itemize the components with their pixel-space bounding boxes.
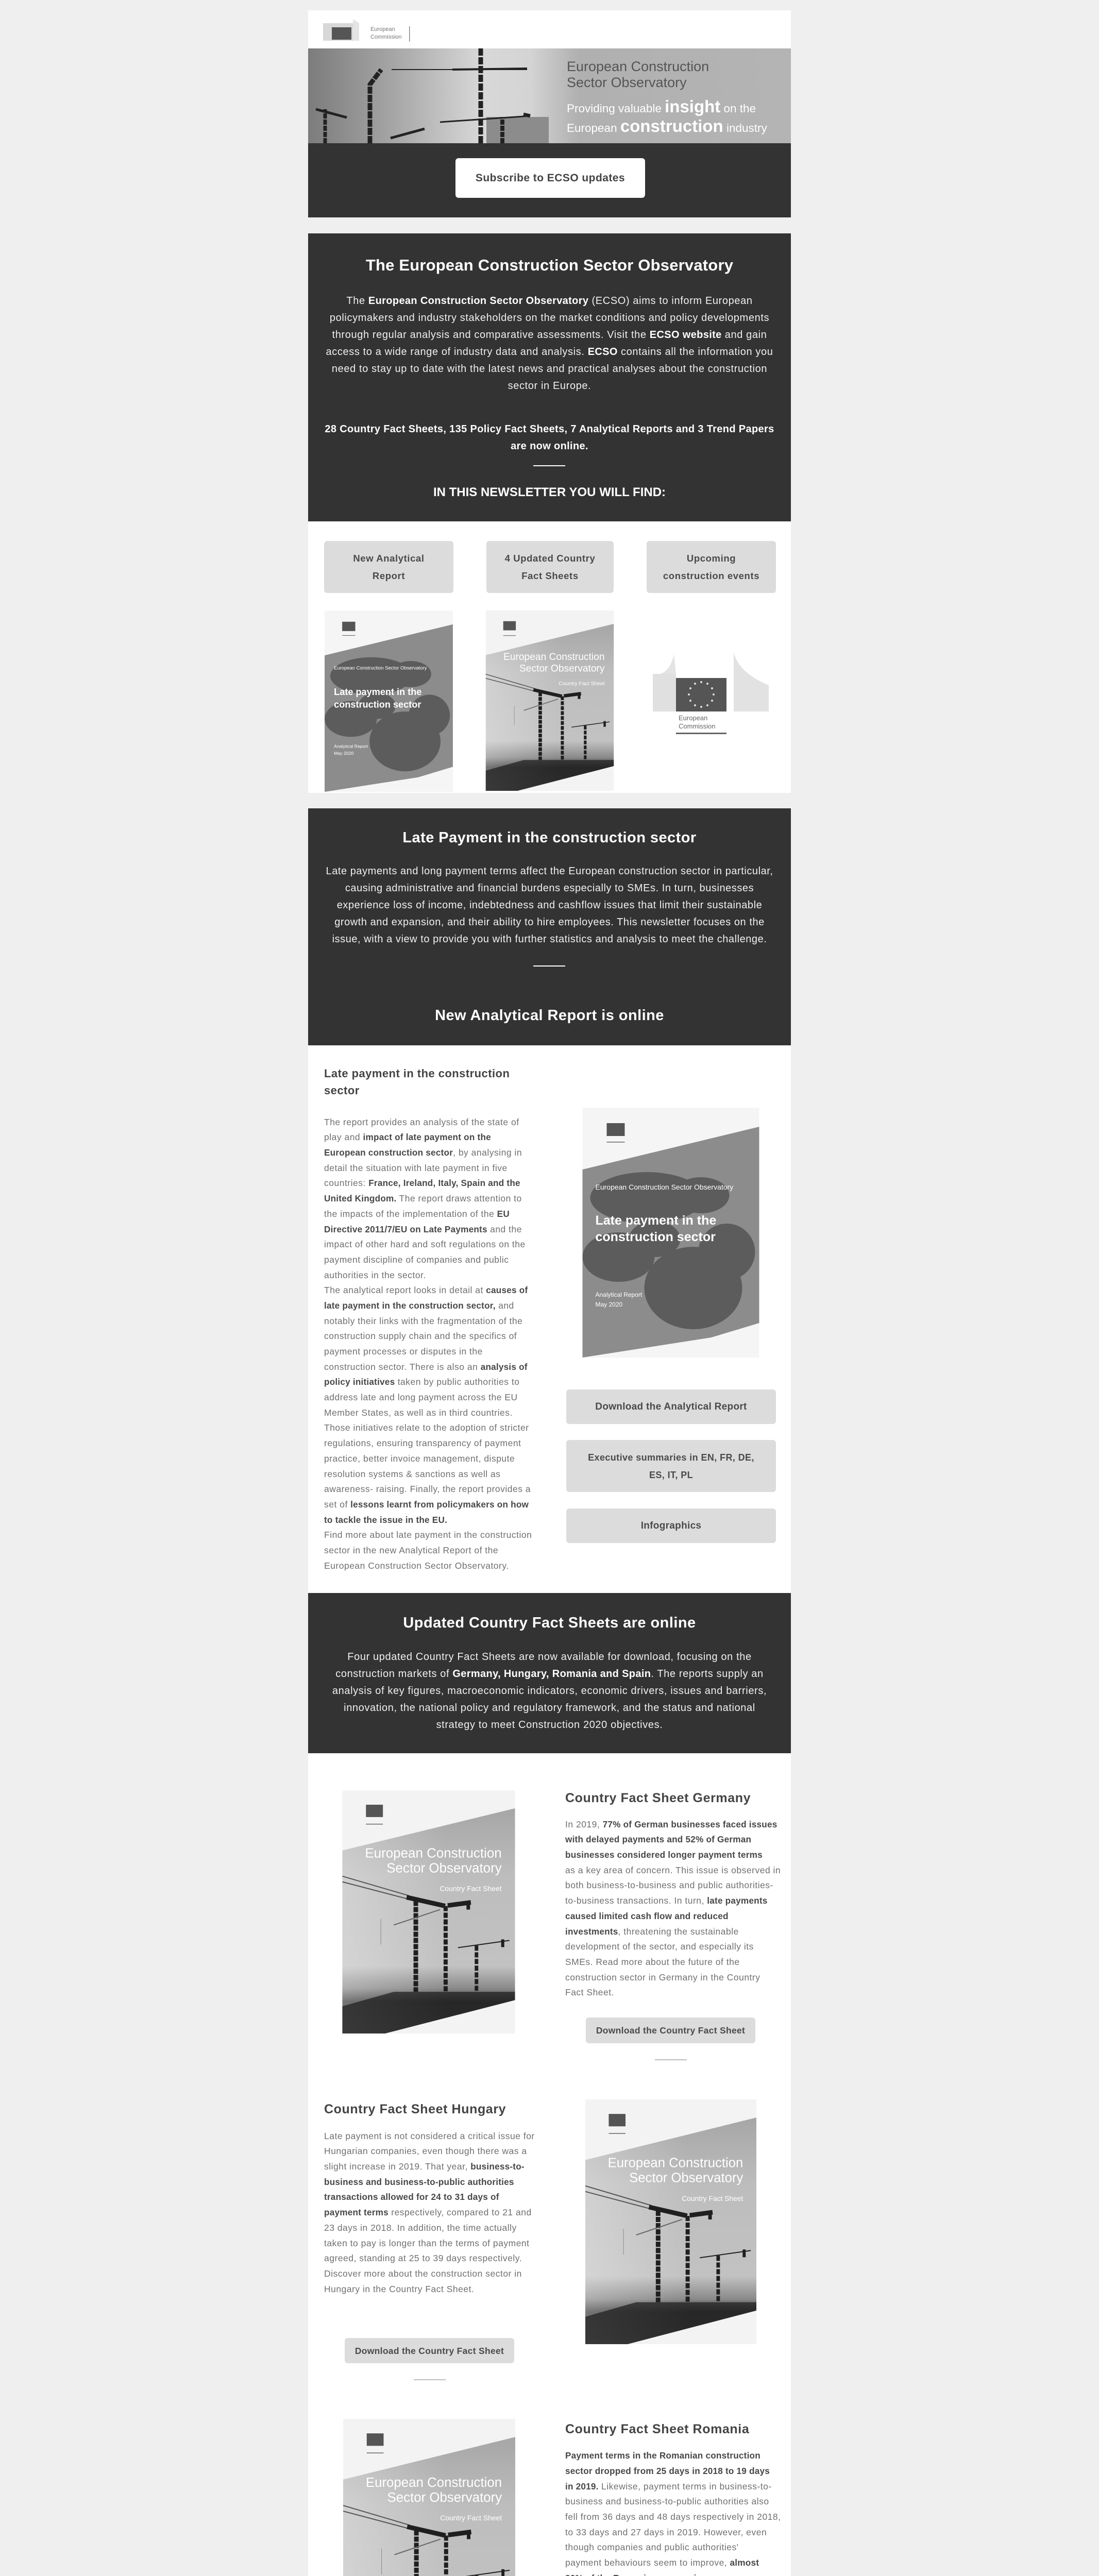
report text: resolution systems & sanctions as well as: [324, 1468, 500, 1479]
report text: The report provides an analysis of the state of: [324, 1117, 519, 1127]
text: Hungary: slight increase in 2019. That year, business-to-: [324, 2161, 525, 2172]
text: Romania: fell from 36 days and 48 days respectively in 2018,: [565, 2512, 781, 2522]
report title: sector: [324, 1084, 360, 1096]
late payment text: [326, 866, 773, 945]
button: new analytical report: [324, 541, 453, 593]
report text: Find more about late payment in the construction: [324, 1530, 532, 1540]
late payment text: growth and expansion, and their ability to hire employees. This newsletter focuses on the: [334, 917, 765, 928]
hero title: [567, 59, 709, 90]
text: Romania: business and business-to-public authorities also: [565, 2496, 769, 2506]
text: Germany: to-business transactions. In turn, late payments: [565, 1895, 768, 1906]
text: Germany: construction sector in Germany in the Country: [565, 1972, 760, 1982]
report text: the impacts of the implementation of the EU: [324, 1209, 510, 1219]
text: Hungary: Hungary in the Country Fact Sheet.: [324, 2284, 474, 2294]
text: Hungary: Discover more about the construction sector in: [324, 2268, 522, 2279]
report text: detail the situation with late payment in five: [324, 1163, 508, 1173]
button: download report: [566, 1389, 776, 1424]
cover: Hungary: Country Fact Sheet: [682, 2194, 743, 2202]
cover: Germany: [342, 1790, 515, 2033]
cover: late payment small: Analytical Report: [334, 743, 368, 749]
report text: [324, 1117, 532, 1571]
report text: European construction sector, by analysing in: [324, 1147, 522, 1158]
intro text: The European Construction Sector Observatory (ECSO) aims to inform European: [346, 295, 753, 306]
panel: fact sheets intro: [308, 1593, 791, 1753]
cover: Romania: Sector Observatory: [387, 2489, 502, 2505]
button: executive summaries: Executive summaries in EN, FR, DE,: [588, 1452, 754, 1462]
cover: late payment small: Late payment in the: [334, 687, 421, 697]
text: Germany: caused limited cash flow and reduced: [565, 1911, 729, 1921]
heading: late payment: Late Payment in the construction sector: [402, 829, 697, 846]
cover: country fact sheet small: [485, 611, 614, 791]
panel: late payment intro: [308, 808, 791, 1045]
cover: country fact sheet small: Country Fact Sheet: [559, 681, 605, 687]
text: Hungary: Hungarian companies, even though there was a: [324, 2146, 527, 2156]
cover: Hungary: Sector Observatory: [629, 2171, 743, 2185]
button: upcoming events: construction events: [663, 570, 759, 581]
text: Germany: Fact Sheet.: [565, 1987, 614, 1997]
cover: Hungary: European Construction: [608, 2156, 743, 2171]
hero tagline: Providing valuable insight on the: [567, 97, 756, 116]
report text: to tackle the issue in the EU.: [324, 1515, 447, 1525]
button: executive summaries: [566, 1440, 776, 1492]
button: upcoming events: [647, 541, 776, 593]
fact sheets text: innovation, the national policy and regulatory framework, and the status and national: [344, 1702, 755, 1714]
button: new analytical report: New Analytical: [353, 552, 425, 564]
fact sheets text: analysis of key figures, macroeconomic indicators, economic drivers, issues and barriers,: [332, 1685, 767, 1697]
title: Germany: Country Fact Sheet Germany: [565, 1791, 751, 1805]
text: Hungary: agreed, standing at 25 to 39 days respectively.: [324, 2253, 522, 2263]
title: Hungary: Country Fact Sheet Hungary: [324, 2102, 506, 2116]
button: subscribe: [455, 158, 645, 198]
intro highlight: [325, 423, 774, 452]
late payment text: Late payments and long payment terms affect the European construction sector in particular,: [326, 866, 773, 877]
report text: Those initiatives relate to the adoption of stricter: [324, 1422, 529, 1433]
text: Romania: sector dropped from 25 days in 2018 to 19 days: [565, 2466, 770, 2476]
text: Germany: In 2019, 77% of German businesses faced issues: [565, 1819, 777, 1829]
late payment text: causing administrative and financial burdens especially to SMEs. In turn, businesses: [345, 883, 754, 894]
report text: policy initiatives taken by public authorities to: [324, 1377, 519, 1387]
text: Romania: Payment terms in the Romanian construction: [565, 2450, 760, 2461]
text: Germany: with delayed payments and 52% of German: [565, 1834, 751, 1844]
button: subscribe: Subscribe to ECSO updates: [476, 172, 625, 183]
heading: fact sheets: Updated Country Fact Sheets are online: [403, 1615, 696, 1631]
report text: sector in the new Analytical Report of the: [324, 1545, 498, 1555]
cover: Romania: [343, 2419, 515, 2576]
panel: contents: [308, 521, 791, 793]
fact sheets text: construction markets of Germany, Hungary, Romania and Spain. The reports supply an: [335, 1668, 764, 1680]
title: Romania: Country Fact Sheet Romania: [565, 2421, 749, 2436]
button: infographics: Infographics: [641, 1520, 701, 1531]
intro text: access to a wide range of industry data and analysis. ECSO contains all the information you: [326, 346, 773, 358]
intro text: sector in Europe.: [508, 380, 591, 392]
report text: impact of other hard and soft regulations on the: [324, 1239, 526, 1249]
hero title: Sector Observatory: [567, 75, 687, 90]
report title: Late payment in the construction: [324, 1066, 510, 1080]
fact sheets text: strategy to meet Construction 2020 objectives.: [436, 1719, 663, 1731]
text: Germany: [565, 1819, 781, 1997]
cover: late payment large: [582, 1108, 759, 1358]
intro highlight: are now online.: [511, 440, 588, 452]
image: European Commission logo: European: [679, 714, 707, 722]
cover: late payment small: European Construction Sector Observatory: [334, 665, 427, 671]
cover: country fact sheet small: European Construction: [503, 652, 605, 663]
text: Hungary: payment terms respectively, compared to 21 and: [324, 2207, 532, 2217]
text: Germany: as a key area of concern. This issue is observed in: [565, 1865, 781, 1875]
header panel: [308, 10, 791, 217]
button: updated fact sheets: [486, 541, 614, 593]
cover: Hungary: [585, 2099, 756, 2344]
late payment text: experience loss of income, indebtedness and cashflow issues that limit their sustainable: [337, 900, 762, 911]
text: Germany: both business-to-business and public authorities-: [565, 1880, 773, 1890]
text: Romania: payment behaviours seem to improve, almost: [565, 2557, 759, 2568]
intro text: [326, 295, 773, 392]
report text: play and impact of late payment on the: [324, 1132, 491, 1142]
panel: fact sheets: [308, 1753, 791, 2576]
button: Germany download: [586, 2018, 755, 2043]
report text: authorities in the sector.: [324, 1270, 426, 1280]
fact sheets text: Four updated Country Fact Sheets are now available for download, focusing on the: [347, 1651, 752, 1663]
cover: Germany: European Construction: [365, 1846, 502, 1861]
heading: observatory: The European Construction Sector Observatory: [366, 256, 733, 274]
intro highlight: 28 Country Fact Sheets, 135 Policy Fact Sheets, 7 Analytical Reports and 3 Trend Papers: [325, 423, 774, 435]
text: Germany: investments, threatening the sustainable: [565, 1926, 739, 1936]
cover: late payment large: construction sector: [596, 1230, 716, 1244]
cover: Romania: European Construction: [366, 2475, 502, 2490]
cover: Romania: Country Fact Sheet: [440, 2514, 502, 2522]
button: updated fact sheets: 4 Updated Country: [505, 552, 595, 564]
report text: regulations, ensuring transparency of payment: [324, 1438, 521, 1448]
text: Hungary: business and business-to-public authorities: [324, 2177, 514, 2187]
report text: Directive 2011/7/EU on Late Payments and the: [324, 1224, 522, 1234]
text: Germany: businesses considered longer payment terms: [565, 1850, 763, 1860]
hero tagline: [567, 97, 767, 135]
button: infographics: [566, 1509, 776, 1543]
cover: Germany: Sector Observatory: [386, 1861, 502, 1876]
cover: late payment small: [325, 611, 453, 792]
text: Hungary: Late payment is not considered a critical issue for: [324, 2131, 535, 2141]
report text: payment discipline of companies and public: [324, 1255, 509, 1265]
cover: late payment large: Late payment in the: [596, 1213, 716, 1228]
intro text: policymakers and industry stakeholders on the market conditions and policy developments: [330, 312, 769, 324]
text: Romania: though companies and public authorities': [565, 2542, 739, 2552]
image: European Commission logo: [645, 629, 778, 761]
report text: practice, better invoice management, dispute: [324, 1453, 515, 1464]
text: Romania: to 33 days and 27 days in 2019. However, even: [565, 2527, 767, 2537]
image: European Commission logo: Commission: [679, 722, 716, 730]
hero tagline: European construction industry: [567, 116, 767, 135]
button: Germany download: Download the Country Fact Sheet: [596, 2025, 745, 2036]
button: new analytical report: Report: [373, 570, 405, 581]
late payment text: issue, with a view to provide you with further statistics and analysis to meet the challenge.: [332, 934, 767, 945]
button: updated fact sheets: Fact Sheets: [521, 570, 579, 581]
report text: countries: France, Ireland, Italy, Spain and the: [324, 1178, 520, 1188]
report text: awareness- raising. Finally, the report provides a: [324, 1484, 531, 1494]
report text: address late and long payment across the EU: [324, 1392, 518, 1402]
report text: Member States, as well as in third countries.: [324, 1408, 513, 1418]
cover: late payment large: European Construction Sector Observatory: [596, 1183, 733, 1191]
report text: notably their links with the fragmentation of the: [324, 1316, 522, 1326]
text: Hungary: 23 days in 2018. In addition, the time actually: [324, 2223, 517, 2233]
cover: late payment large: May 2020: [596, 1301, 623, 1308]
logo: European Commission: European: [370, 26, 395, 32]
text: Hungary: transactions allowed for 24 to 31 days of: [324, 2192, 499, 2202]
cover: country fact sheet small: Sector Observatory: [519, 663, 605, 674]
hero title: European Construction: [567, 59, 709, 74]
text: Hungary: taken to pay is longer than the terms of payment: [324, 2238, 530, 2248]
text: Romania: [565, 2448, 781, 2576]
report text: The analytical report looks in detail at causes of: [324, 1285, 528, 1295]
text: Germany: SMEs. Read more about the future of the: [565, 1957, 740, 1967]
text: Romania: in 2019. Likewise, payment terms in business-to-: [565, 2481, 772, 2492]
hero banner with cranes: [308, 48, 791, 143]
intro text: need to stay up to date with the latest news and practical analyses about the construction: [332, 363, 767, 374]
fact sheets text: [332, 1651, 767, 1731]
report text: construction sector. There is also an analysis of: [324, 1362, 528, 1372]
report title: [324, 1066, 510, 1096]
text: Germany: development of the sector, and especially its: [565, 1941, 754, 1952]
text: Hungary: [324, 2129, 535, 2297]
report text: construction supply chain and the specifics of: [324, 1331, 517, 1341]
panel: intro: [308, 233, 791, 521]
intro text: through regular analysis and comparative assessments. Visit the ECSO website and gain: [332, 329, 767, 340]
report text: European Construction Sector Observatory.: [324, 1561, 509, 1571]
logo: European Commission: [323, 19, 410, 42]
button: upcoming events: Upcoming: [687, 552, 736, 564]
button: executive summaries: ES, IT, PL: [649, 1469, 693, 1480]
logo: European Commission: Commission: [370, 34, 402, 40]
report text: payment processes or disputes in the: [324, 1346, 483, 1357]
heading: new report: New Analytical Report is online: [435, 1007, 664, 1024]
cover: Germany: Country Fact Sheet: [439, 1885, 502, 1893]
cover: late payment small: May 2020: [334, 751, 353, 756]
cover: late payment small: construction sector: [334, 700, 421, 710]
cover: late payment large: Analytical Report: [596, 1291, 643, 1298]
report text: set of lessons learnt from policymakers on how: [324, 1499, 529, 1510]
heading: in this newsletter: IN THIS NEWSLETTER YOU WILL FIND:: [433, 485, 666, 499]
button: Hungary download: Download the Country Fact Sheet: [355, 2345, 504, 2355]
report text: United Kingdom. The report draws attention to: [324, 1193, 522, 1204]
button: download report: Download the Analytical Report: [595, 1401, 747, 1412]
dark band: [308, 143, 791, 217]
report text: late payment in the construction sector, and: [324, 1300, 514, 1311]
button: Hungary download: [345, 2338, 514, 2363]
panel: analytical report: [308, 1045, 791, 1593]
